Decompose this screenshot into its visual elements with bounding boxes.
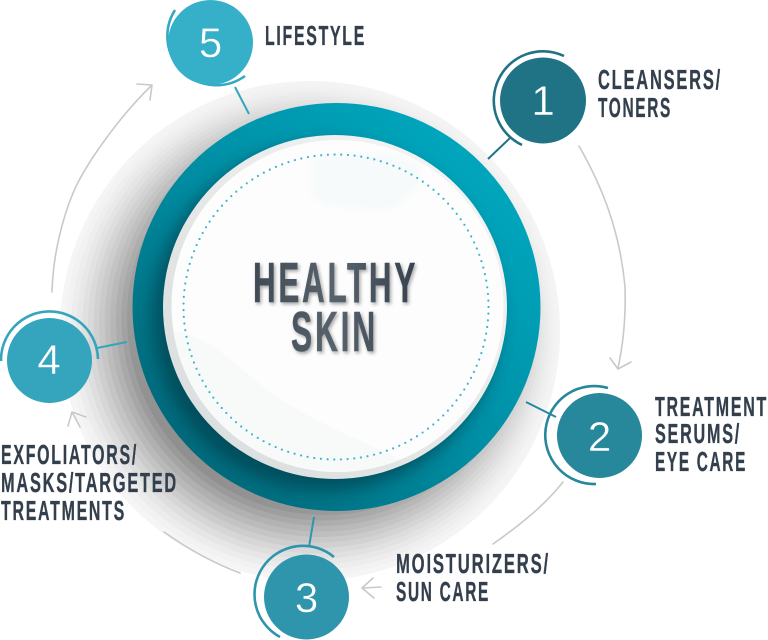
step 1: cleansers / toners [488,51,722,159]
title: healthy skin: SKIN [291,300,378,364]
step 1: cleansers / toners: 1 [531,77,555,124]
arrow: step 1 to 2 [579,146,631,369]
title: healthy skin [253,251,418,364]
halo shadow [60,81,560,581]
step 3: moisturizers / sun care: MOISTURIZERS/ [396,548,550,579]
step 1: cleansers / toners: TONERS [598,92,672,123]
step 3: moisturizers / sun care: SUN CARE [396,576,490,607]
step 5: lifestyle [167,0,366,114]
step 4: exfoliators / masks / targeted treatments: EXFOLIATORS/ [1,439,138,470]
step 5: lifestyle: LIFESTYLE [265,20,366,51]
dotted circle [184,154,488,460]
step 4: exfoliators / masks / targeted treatments: MASKS/TARGETED [1,467,178,498]
step 4: exfoliators / masks / targeted treatments [1,311,178,526]
arrow: step 2 to 3 [362,482,563,598]
step 5: lifestyle: 5 [199,19,222,66]
title: healthy skin: HEALTHY [253,251,418,315]
step 4: exfoliators / masks / targeted treatments: 4 [37,336,61,383]
step 2: treatment serums / eye care [526,386,768,484]
step 3: moisturizers / sun care [255,517,550,640]
step 2: treatment serums / eye care: 2 [588,413,611,460]
arrow: step 3 to 4 [68,412,240,573]
arrow: step 4 to 5 [52,84,152,292]
step 3: moisturizers / sun care: 3 [295,574,318,621]
white centre disc [163,135,507,490]
step 4: exfoliators / masks / targeted treatments: TREATMENTS [1,495,126,526]
teal ring [132,103,540,511]
